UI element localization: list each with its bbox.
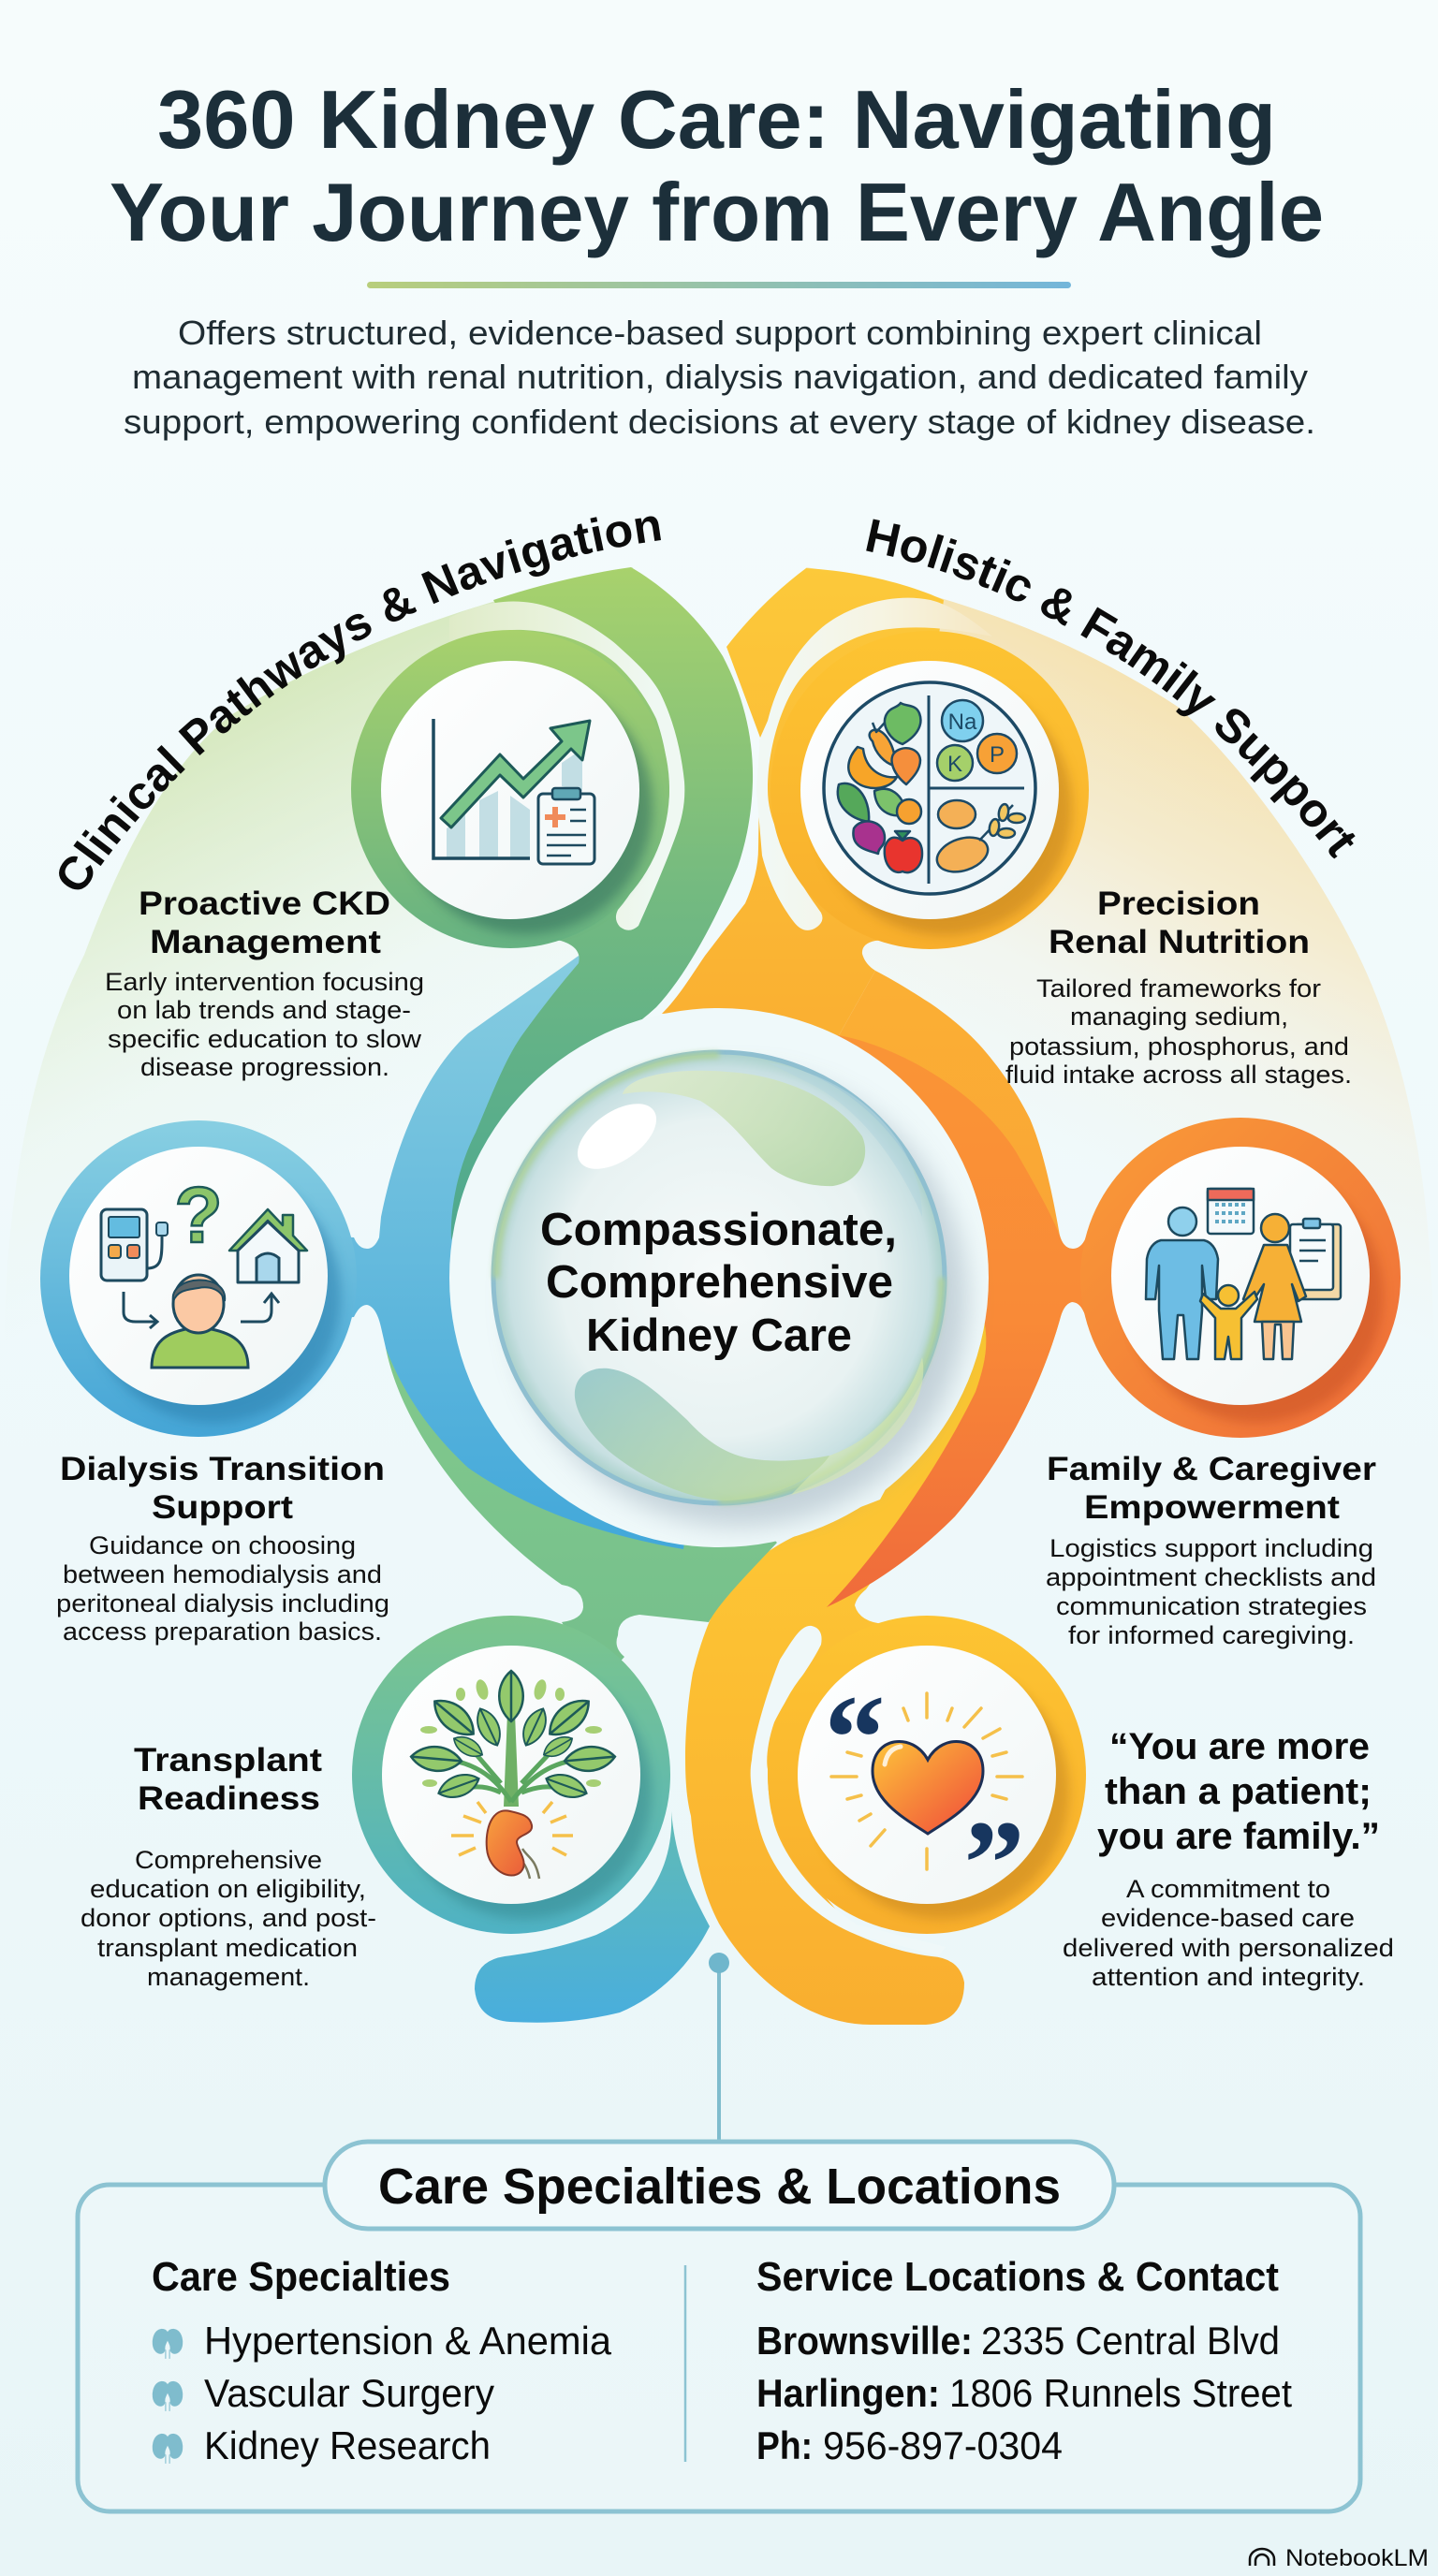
text: precision nutrition (1005, 886, 1352, 1089)
node: quote (768, 1616, 1086, 1934)
icon: tree and kidney (410, 1671, 616, 1879)
text: quote: attention and integrity. (1092, 1963, 1365, 1991)
text: quote: delivered with personalized (1063, 1934, 1394, 1962)
icon: family with calendar and clipboard (1146, 1189, 1341, 1359)
text: transplant: education on eligibility, (90, 1875, 366, 1903)
icon: heart with quote marks: ” (964, 1796, 1024, 1931)
text: quote: “You are more (1109, 1726, 1370, 1767)
connector (709, 1953, 729, 2142)
sphere swoosh: top (623, 1071, 865, 1186)
text: precision nutrition: Tailored frameworks for (1036, 974, 1321, 1003)
column: locations: Ph: (756, 2423, 813, 2467)
intro paragraph (124, 314, 1315, 441)
column: locations: Harlingen: (756, 2371, 940, 2415)
sphere tint: upper right (768, 1062, 922, 1217)
text: family: appointment checklists and (1046, 1563, 1376, 1591)
curved heading: clinical: Clinical Pathways & Navigation (59, 517, 661, 889)
node: dialysis (40, 1120, 357, 1437)
column: care specialties: Vascular Surgery (204, 2371, 494, 2415)
ring sliver: nutrition (756, 598, 992, 930)
panel heading pill: Care Specialties & Locations (378, 2159, 1061, 2215)
node: nutrition (770, 631, 1089, 949)
icon: patient choosing dialysis (101, 1171, 307, 1368)
icon: renal plate: Na (948, 710, 977, 735)
column: locations: 2335 Central Blvd (981, 2319, 1280, 2363)
icon: patient choosing dialysis: ? (174, 1171, 223, 1259)
text: family: communication strategies (1056, 1592, 1367, 1620)
ribbon: orange (805, 971, 1123, 1607)
text: family: Empowerment (1084, 1489, 1340, 1526)
ribbon: yellow lower (685, 1292, 1006, 2025)
text: proactive CKD: Management (150, 924, 381, 960)
column: care specialties: Care Specialties (152, 2254, 450, 2300)
node: transplant (352, 1616, 670, 1934)
icon: renal plate (824, 682, 1035, 894)
text: transplant (81, 1742, 376, 1991)
text: proactive CKD: on lab trends and stage- (117, 996, 411, 1024)
ring sliver: clinical (449, 601, 684, 930)
column: care specialties (152, 2254, 612, 2467)
intro paragraph: Offers structured, evidence-based support combining expert clinical (178, 314, 1262, 352)
ribbon: yellow upper (662, 568, 944, 1037)
sphere swoosh: bottom (575, 1368, 829, 1500)
text: proactive CKD: Early intervention focusing (105, 968, 424, 996)
panel: care specialties and locations (78, 2142, 1360, 2511)
text: dialysis: Guidance on choosing (89, 1531, 356, 1559)
text: precision nutrition: fluid intake across all stages. (1005, 1061, 1352, 1089)
column: locations: 956-897-0304 (823, 2423, 1063, 2467)
icon: renal plate: K (947, 752, 962, 777)
icon: kidneys (153, 2381, 183, 2411)
ribbon: blue (318, 956, 719, 1549)
column: locations: 1806 Runnels Street (949, 2371, 1292, 2415)
text: dialysis: Dialysis Transition (60, 1451, 385, 1487)
text: proactive CKD (105, 886, 424, 1081)
text: transplant: Transplant (134, 1742, 322, 1778)
sphere tint: lower right (791, 1357, 923, 1495)
text: quote (1063, 1726, 1394, 1991)
column: locations: Brownsville: (756, 2319, 973, 2363)
text: dialysis: access preparation basics. (63, 1617, 382, 1646)
text: transplant: Readiness (138, 1780, 320, 1817)
node: proactive CKD (351, 630, 669, 948)
icon: kidneys (153, 2329, 183, 2359)
text: transplant: Comprehensive (135, 1846, 322, 1874)
center label: Kidney Care (586, 1310, 852, 1361)
text: transplant: management. (147, 1963, 310, 1991)
text: family: for informed caregiving. (1068, 1621, 1355, 1649)
column: locations: Service Locations & Contact (756, 2254, 1279, 2300)
text: quote: A commitment to (1126, 1875, 1330, 1903)
text: quote: you are family.” (1097, 1816, 1380, 1857)
title: 360 Kidney Care: Navigating (157, 73, 1276, 166)
column: care specialties: Kidney Research (204, 2423, 491, 2467)
text: precision nutrition: Precision (1097, 886, 1260, 922)
icon: renal plate: P (990, 742, 1005, 768)
text: quote: evidence-based care (1101, 1904, 1355, 1932)
text: proactive CKD: specific education to slow (108, 1025, 422, 1053)
ribbon: teal tail (475, 1811, 710, 2023)
text: family: Family & Caregiver (1047, 1451, 1376, 1487)
center sphere (493, 1052, 967, 1527)
icon: chart and clipboard (433, 719, 594, 864)
icon: heart with quote marks (824, 1671, 1024, 1931)
column: locations (756, 2254, 1292, 2467)
ring sliver: quote (751, 1626, 946, 1955)
text: dialysis: peritoneal dialysis including (56, 1589, 389, 1617)
curved heading: holistic: Holistic & Family Support (866, 519, 1356, 859)
text: quote: than a patient; (1105, 1771, 1372, 1812)
icon: kidneys (153, 2434, 183, 2464)
column: care specialties: Hypertension & Anemia (204, 2319, 612, 2363)
text: dialysis: between hemodialysis and (63, 1560, 382, 1588)
center label: Comprehensive (546, 1257, 893, 1308)
text: precision nutrition: Renal Nutrition (1049, 924, 1310, 960)
intro paragraph: support, empowering confident decisions at every stage of kidney disease. (124, 402, 1315, 441)
node: family (1080, 1118, 1401, 1438)
sphere clearance (449, 1008, 989, 1547)
text: precision nutrition: managing sedium, (1070, 1003, 1288, 1031)
panel: left dome (3, 567, 633, 1498)
icon: heart with quote marks: “ (824, 1671, 886, 1806)
text: proactive CKD: disease progression. (140, 1053, 389, 1081)
text: dialysis: Support (152, 1489, 293, 1526)
title (110, 73, 1324, 258)
text: proactive CKD: Proactive CKD (139, 886, 390, 922)
text: family: Logistics support including (1049, 1534, 1373, 1562)
sphere highlight (566, 1090, 668, 1182)
NotebookLM mark: NotebookLM (1285, 2545, 1429, 2571)
intro paragraph: management with renal nutrition, dialysis navigation, and dedicated family (132, 358, 1308, 396)
ribbon: green lower (386, 1310, 777, 1685)
title: Your Journey from Every Angle (110, 166, 1324, 258)
text: transplant: donor options, and post- (81, 1904, 376, 1932)
text: dialysis (56, 1451, 389, 1646)
center label: Compassionate, (540, 1205, 897, 1255)
center label (540, 1205, 897, 1361)
text: family (1046, 1451, 1376, 1649)
ribbon: green upper (451, 567, 753, 1240)
panel heading pill (325, 2142, 1114, 2229)
panel: right dome (806, 567, 1435, 1498)
text: transplant: transplant medication (97, 1934, 358, 1962)
text: precision nutrition: potassium, phosphorus, and (1009, 1032, 1349, 1061)
title divider (367, 282, 1071, 288)
